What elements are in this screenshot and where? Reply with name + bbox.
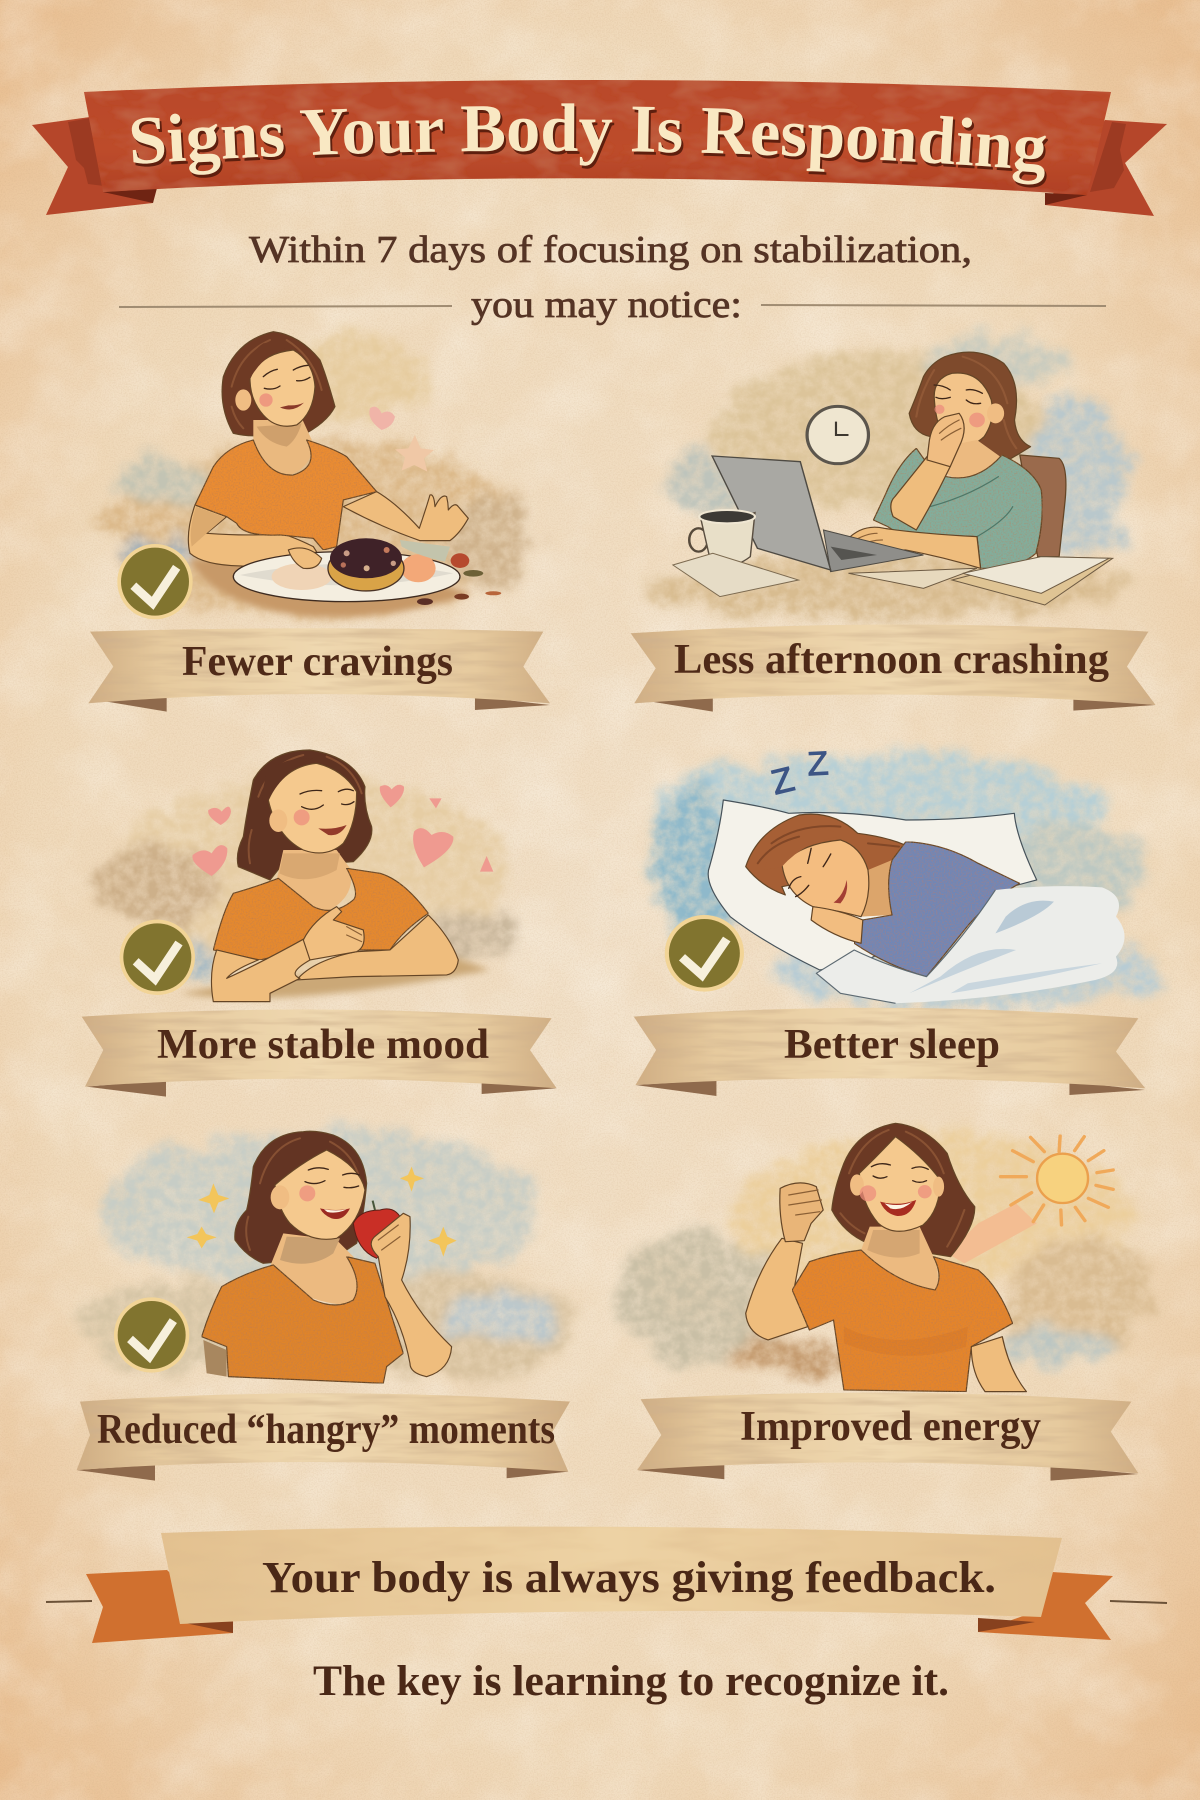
- watercolor wash: [107, 333, 530, 613]
- icon: check badge: [114, 1297, 189, 1373]
- icon: check badge: [120, 920, 195, 995]
- banner fold right: [1045, 193, 1087, 205]
- icon: check badge: [117, 544, 193, 619]
- icon: hearts: [192, 785, 493, 876]
- title text: Signs Your Body Is Responding: [132, 103, 1048, 188]
- panel: reduced hangry moments: [77, 1130, 577, 1481]
- watercolor wash: [645, 340, 1131, 617]
- panel: better sleep: [634, 745, 1157, 1096]
- blanket: [816, 886, 1125, 1003]
- icon: sun: [947, 1136, 1113, 1263]
- ribbon: [88, 628, 550, 712]
- title banner: [32, 80, 1167, 216]
- panel: improved energy: [617, 1123, 1147, 1481]
- icon: sleep letters: Z: [767, 760, 798, 802]
- footer left tail: [86, 1570, 233, 1643]
- icon: sparkles: [187, 1167, 457, 1257]
- icon: pink heart: [369, 407, 395, 430]
- laptop: [712, 456, 923, 572]
- panel: fewer cravings: [88, 332, 550, 712]
- ribbon: [77, 1393, 570, 1481]
- footer main text: Your body is always giving feedback.: [262, 1553, 996, 1602]
- banner left tail: [32, 117, 153, 215]
- ribbon: [637, 1393, 1138, 1481]
- subtitle line one: Within 7 days of focusing on stabilization,: [249, 229, 972, 271]
- figure: sleeping woman: [746, 814, 1020, 977]
- label: More stable mood: [157, 1022, 489, 1068]
- label: Fewer cravings: [182, 639, 453, 685]
- closing line: The key is learning to recognize it.: [313, 1658, 949, 1705]
- watercolor wash: [97, 777, 520, 987]
- footer main band: [161, 1527, 1062, 1624]
- banner main band: [84, 80, 1111, 195]
- wall clock: [807, 406, 868, 464]
- icon: sleep letters: [767, 745, 829, 802]
- label: Better sleep: [784, 1022, 1000, 1068]
- figure: woman pushing away food: [188, 332, 468, 570]
- table: [180, 957, 490, 998]
- figure: cheerful woman raising fist: [746, 1123, 1026, 1392]
- icon: sleep letters: Z: [806, 745, 829, 783]
- figure: woman with hand on chest: [211, 750, 458, 1002]
- watercolor wash: [654, 753, 1157, 1007]
- figure: yawning woman at laptop: [847, 352, 1066, 568]
- footer fold shadow: [180, 1618, 1035, 1633]
- papers: [673, 553, 1113, 605]
- banner fold left: [103, 188, 157, 203]
- coffee mug: [689, 510, 755, 566]
- ribbon: [634, 1008, 1145, 1096]
- watercolor wash: [83, 1130, 577, 1377]
- subtitle line two: you may notice:: [471, 284, 742, 326]
- label: Reduced “hangry” moments: [97, 1407, 555, 1453]
- footer right tail: [978, 1572, 1113, 1640]
- footer banner: [46, 1527, 1167, 1643]
- icon: pale star: [395, 435, 434, 472]
- pillow: [708, 800, 1037, 970]
- figure: woman smelling apple: [202, 1131, 452, 1383]
- label: Improved energy: [740, 1404, 1041, 1450]
- icon: check badge: [665, 915, 744, 992]
- panel: less afternoon crashing: [631, 340, 1156, 712]
- watercolor wash: [617, 1133, 1147, 1377]
- ribbon: [631, 625, 1156, 712]
- ribbon: [82, 1010, 557, 1097]
- panel: more stable mood: [82, 750, 557, 1097]
- plate of food: [233, 538, 501, 605]
- table shadow: [190, 553, 473, 617]
- label: Less afternoon crashing: [674, 637, 1109, 683]
- apple: [353, 1201, 403, 1258]
- banner right tail: [1045, 120, 1167, 216]
